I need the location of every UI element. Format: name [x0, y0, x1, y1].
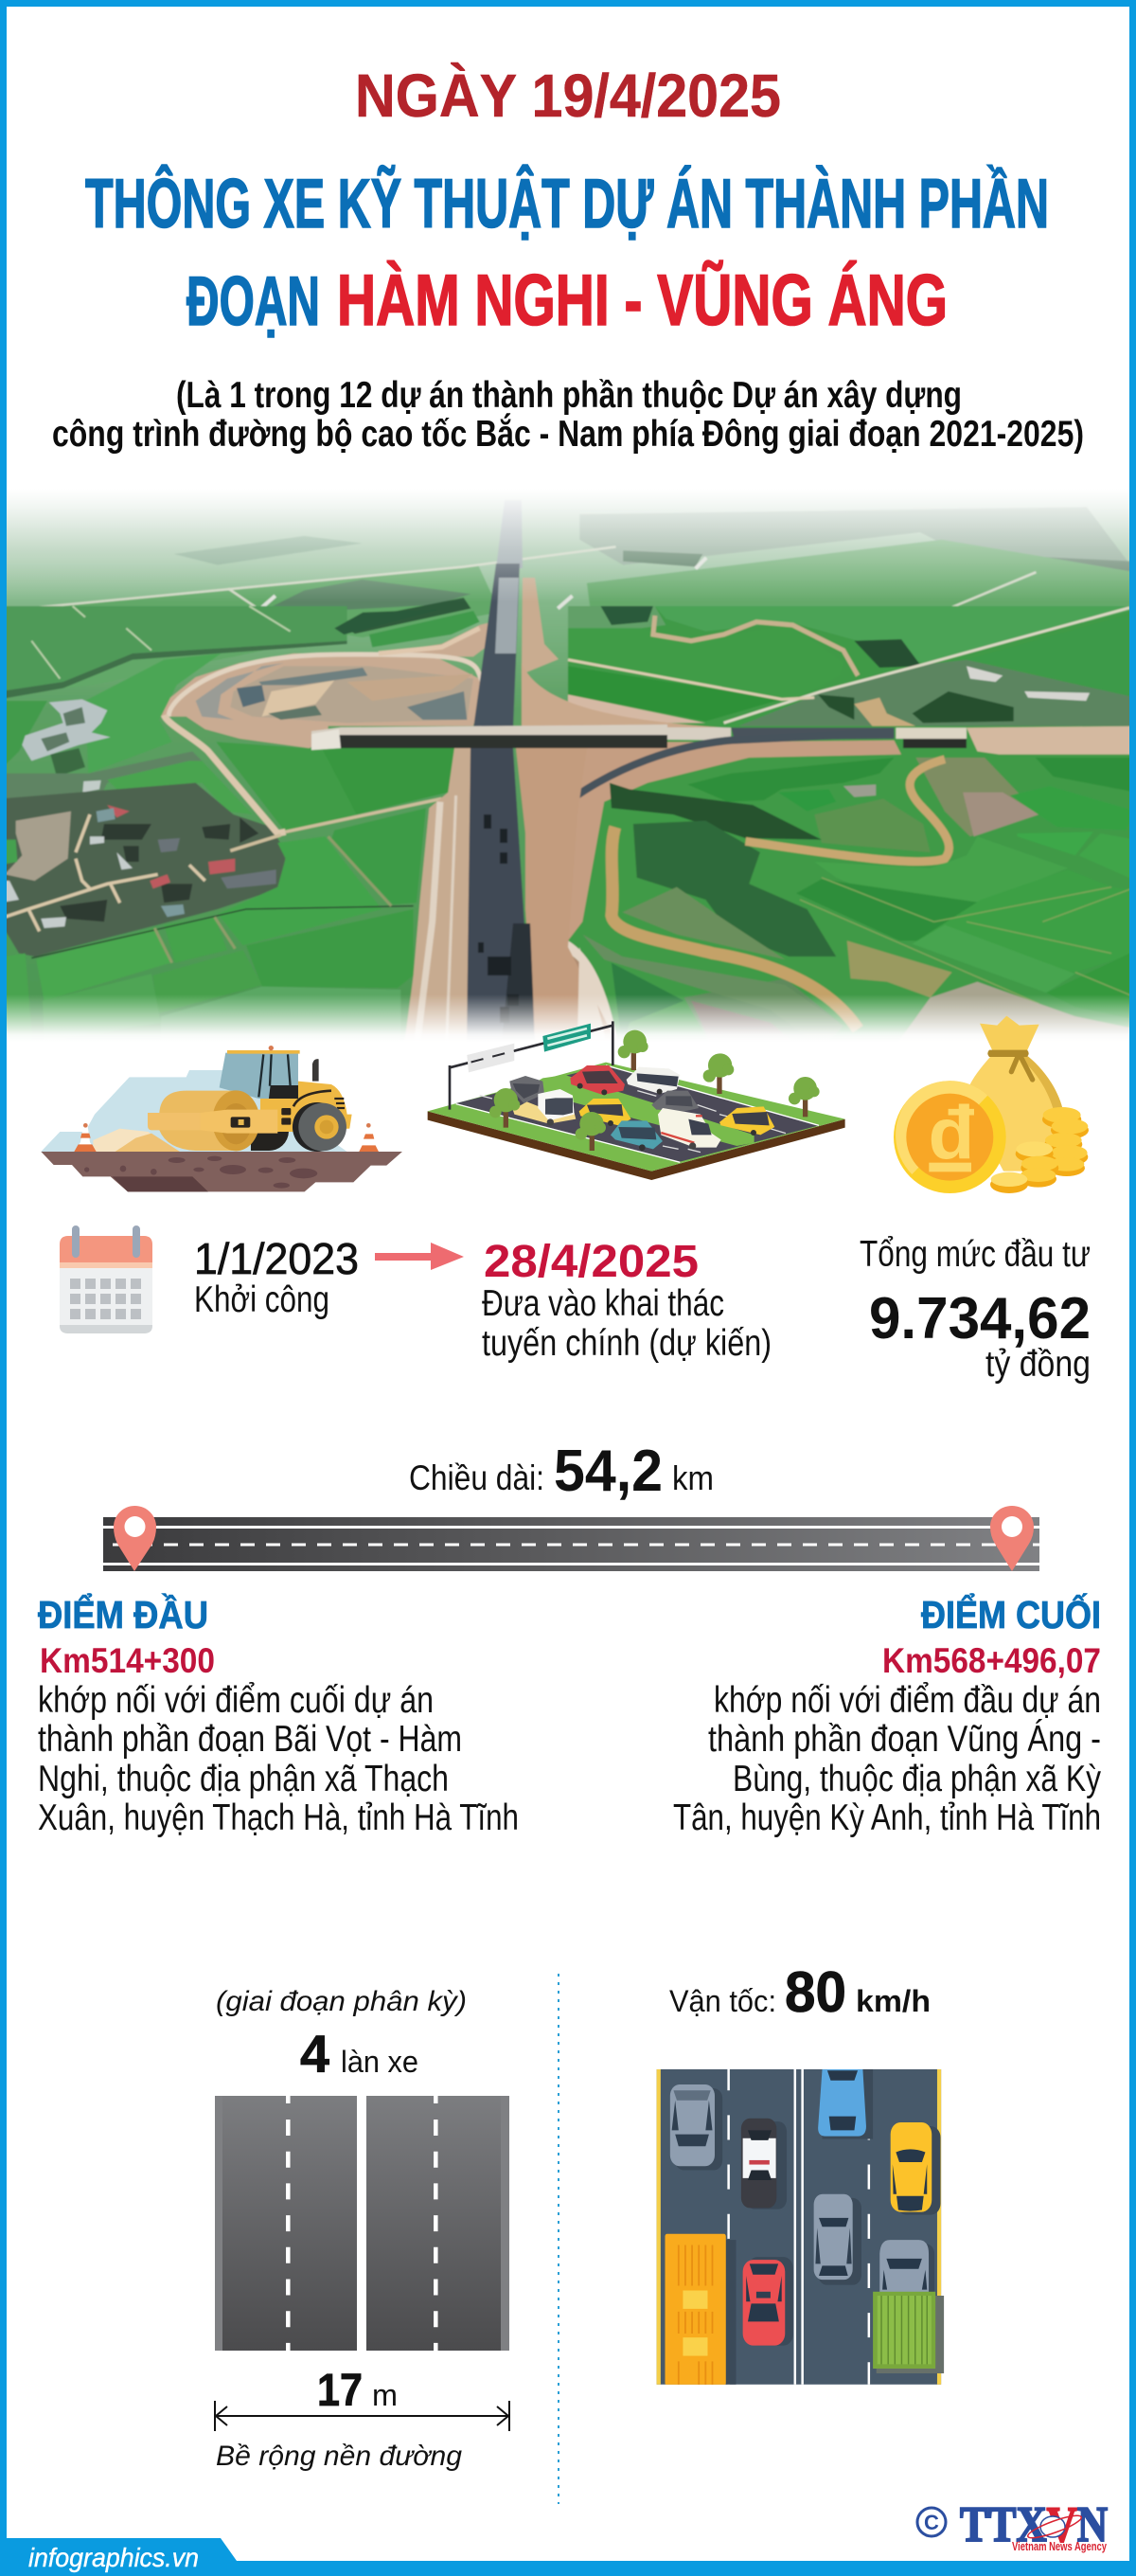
central dirt wedges	[516, 748, 615, 1040]
length heading: km	[672, 1458, 714, 1497]
road width: Bề rộng nền đường	[216, 2441, 462, 2472]
bridge right part	[967, 726, 1136, 755]
length heading: Chiều dài:	[409, 1458, 544, 1497]
road width: m	[372, 2378, 398, 2412]
lanes caption: 4	[300, 2024, 329, 2084]
end point block	[673, 1592, 1101, 1838]
logo: TTXVN: C	[924, 2511, 939, 2534]
icon: road roller	[41, 1046, 402, 1191]
subtitle: (Là 1 trong 12 dự án thành phần thuộc Dự án xây dựng	[176, 375, 962, 416]
icon: start pin	[114, 1506, 156, 1571]
icon: money bag and dong coin	[894, 1016, 1089, 1193]
lanes caption: làn xe	[341, 2045, 418, 2079]
completion date: tuyến chính (dự kiến)	[482, 1323, 772, 1364]
gantry signs	[450, 1021, 612, 1110]
completion date: 28/4/2025	[484, 1237, 699, 1287]
icon: calendar	[60, 1229, 152, 1333]
vehicles	[509, 1065, 774, 1151]
photo bottom fade	[0, 994, 1136, 1042]
road width: 17	[317, 2366, 363, 2416]
start date: 1/1/2023	[194, 1234, 359, 1283]
cones	[74, 1123, 379, 1152]
speed caption: Vận tốc:	[669, 1984, 776, 2018]
arrow	[375, 1243, 464, 1270]
total investment: tỷ đồng	[985, 1344, 1091, 1385]
subtitle	[52, 375, 1084, 455]
start date: Khởi công	[194, 1279, 329, 1320]
far distance	[40, 508, 1129, 672]
overpass bridge	[311, 724, 668, 737]
icon: end pin	[990, 1506, 1034, 1571]
left half of photo	[0, 606, 492, 1048]
total investment	[860, 1234, 1091, 1385]
trees	[489, 1030, 820, 1151]
lanes caption: (giai đoạn phân kỳ)	[216, 1986, 467, 2017]
lower-right terrain	[687, 758, 894, 802]
total investment: 9.734,62	[869, 1286, 1091, 1351]
icon: expressway with traffic	[428, 1021, 845, 1180]
dirt along highway	[404, 745, 473, 1048]
lanes caption	[216, 1986, 467, 2084]
title: line two: ĐOẠN	[186, 263, 320, 340]
completion date	[482, 1237, 772, 1364]
green truck	[873, 2292, 944, 2373]
logo: TTXVN: TTXVN	[960, 2497, 1108, 2552]
grey car three	[879, 2240, 934, 2299]
police car	[741, 2119, 787, 2209]
yellow car	[891, 2122, 941, 2215]
grey car	[670, 2084, 722, 2170]
blue car	[818, 2069, 873, 2139]
photo top fade	[0, 489, 1136, 602]
end point block: Km568+496,07	[882, 1641, 1101, 1680]
four lane road	[215, 2096, 509, 2351]
start point block: ĐIỂM ĐẦU	[38, 1592, 208, 1637]
clover ring	[161, 622, 492, 748]
length heading: 54,2	[554, 1439, 663, 1504]
start point block: khớp nối với điểm cuối dự án	[38, 1680, 434, 1721]
speed caption: km/h	[856, 1984, 931, 2018]
road width	[215, 2366, 509, 2472]
icon: money bag and dong coin: đ	[929, 1090, 975, 1174]
title: line two: HÀM NGHI - VŨNG ÁNG	[337, 260, 948, 341]
title: date: NGÀY 19/4/2025	[355, 62, 781, 130]
title: line two	[186, 260, 948, 341]
orange truck	[665, 2234, 736, 2386]
completion date: Đưa vào khai thác	[482, 1283, 724, 1324]
start point block: thành phần đoạn Bãi Vọt - Hàm	[38, 1719, 462, 1760]
road strip with pins	[103, 1506, 1039, 1571]
start date	[194, 1234, 359, 1320]
start point block: Nghi, thuộc địa phận xã Thạch	[38, 1759, 449, 1799]
start point block: Xuân, huyện Thạch Hà, tỉnh Hà Tĩnh	[38, 1798, 519, 1838]
speed caption	[669, 1960, 931, 2024]
main expressway	[496, 500, 523, 568]
end point block: ĐIỂM CUỐI	[921, 1592, 1101, 1637]
length heading	[409, 1439, 714, 1504]
speed caption: 80	[785, 1960, 846, 2024]
start point block	[38, 1592, 519, 1838]
highway traffic illustration	[657, 2069, 944, 2386]
red car	[743, 2257, 793, 2346]
grey car two	[814, 2194, 861, 2285]
aerial photo of the interchange	[0, 489, 1136, 1048]
start point block: Km514+300	[40, 1641, 215, 1680]
right half of photo	[568, 606, 1136, 1048]
footer site name: infographics.vn	[28, 2543, 199, 2572]
